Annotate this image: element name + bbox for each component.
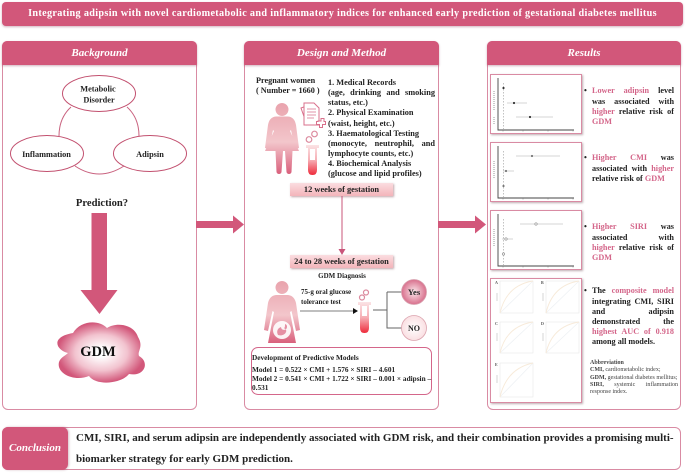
outcome: yes [401,279,427,305]
text: composite model finding: among all models. [592,337,655,346]
text: abbreviations: CMI, cardiometabolic index; [590,367,660,373]
text: study measurements: 2. Physical Examination [328,108,414,117]
text: composite model finding: highest AUC of 0.918 [592,327,674,336]
arrow: 12 weeks to 24-28 weeks [338,196,346,255]
panel: results [487,41,681,410]
text: SIRI finding: GDM [592,253,612,262]
text: pregnant women [256,76,320,95]
text: composite model finding [584,286,674,346]
text: study measurements [328,78,435,178]
icon: blood tube diagnostic [358,289,371,333]
arrow: test to tube [300,308,358,314]
chart: ROC curves [490,278,582,403]
text: adipsin finding: was associated with [592,96,674,106]
text: conclusion statement: CMI, SIRI, and serum adipsin are independently associated with GDM risk, and their combination provides a promising multi- [76,432,674,444]
text: study measurements: (waist, height, etc.) [328,118,395,128]
text: SIRI finding: Higher SIRI was [592,222,674,231]
text: adipsin finding: higher relative risk of [592,106,674,116]
chart: ROC curves: B [541,280,544,285]
diagram: metabolic disorder, inflammation, adipsin: Inflammation [22,150,71,159]
icon: pregnant woman [265,103,299,174]
label: GDM: GDM [80,344,116,360]
text: study measurements: lymphocyte counts, etc.) [328,149,413,158]
icon: GDM cloud [57,322,145,383]
chart: ROC curves: C [495,321,498,326]
text: CMI finding [584,153,674,182]
outcome: no [401,315,427,341]
heading: conclusion: Conclusion [9,442,61,454]
icon: pregnant woman with fetus [264,281,300,343]
text: composite model finding: demonstrated the [592,316,674,326]
bullet: • [584,153,587,162]
bullet: • [584,222,587,231]
heading: background: Background [71,47,128,59]
box: 24 to 28 weeks of gestation [290,255,393,268]
text: CMI finding: relative risk of GDM [592,174,665,182]
outcome: yes: Yes [408,287,421,297]
heading: results [487,41,681,65]
panel: design and method [244,41,439,410]
text: study measurements: (glucose and lipid profiles) [328,169,422,178]
text: CMI finding: Higher CMI was [592,153,674,162]
text: study measurements: 3. Haematological Testing [328,128,419,138]
chart: adipsin forest plot [490,74,582,134]
panel: conclusion [2,427,681,470]
text: abbreviations: Abbreviation [590,360,624,366]
text: abbreviations: SIRI, systemic inflammation [590,382,678,388]
model equations [252,364,432,392]
panel: background [2,41,197,410]
text: SIRI finding: higher relative risk of [592,242,674,252]
icon: blood tube [306,130,319,175]
text: composite model finding: The composite model [592,286,674,295]
text: SIRI finding [584,222,674,262]
text: abbreviations: GDM, gestational diabetes mellitus; [590,375,677,381]
text: pregnant women: Pregnant women [256,76,315,85]
text: SIRI finding: associated with [592,232,674,242]
diagram: metabolic disorder, inflammation, adipsin: Adipsin [136,150,164,159]
text: abbreviations: response index. [590,389,627,395]
branching connector: yes or no [373,292,402,328]
title [2,2,683,26]
model equations: Model 1 = 0.522 × CMI + 1.576 × SIRI – 4.601 [252,364,395,374]
text: adipsin finding: Lower adipsin level [592,86,674,95]
text: abbreviations [590,360,678,395]
box: 12 weeks of gestation: 12 weeks of gestation [304,185,379,194]
title: Integrating adipsin with novel cardiometabolic and inflammatory indices for enhanced early prediction of gestational diabetes mellitus [28,8,657,19]
heading: background [2,41,197,65]
text: adipsin finding [584,86,674,126]
text: study measurements: (monocyte, neutrophil, and [328,139,435,148]
text: CMI finding: associated with higher [592,164,674,172]
model heading: Development of Predictive Models [252,353,359,362]
text: oral glucose tolerance test: tolerance test [301,298,341,306]
text: composite model finding: and adipsin [592,306,674,316]
box: 12 weeks of gestation [290,183,393,196]
diagram: metabolic disorder, inflammation, adipsin: Disorder [83,96,115,104]
heading: results: Results [567,47,600,59]
model equations: 0.531 [252,383,268,392]
text: pregnant women: ( Number = 1660 ) [256,86,320,95]
heading: design and method [244,41,439,65]
bullet: • [584,286,587,295]
text: oral glucose tolerance test [301,288,351,306]
chart: ROC curves: E [495,362,498,367]
chart: ROC curves: A [495,280,498,285]
text: oral glucose tolerance test: 75-g oral glucose [301,288,351,296]
arrow: background to design [196,216,244,234]
arrow: design to results [438,216,486,234]
diagram: metabolic disorder, inflammation, adipsin [10,75,187,174]
text: adipsin finding: GDM [592,117,612,126]
heading: design and method: Design and Method [297,47,386,59]
diagram: metabolic disorder, inflammation, adipsin: Metabolic [80,84,116,94]
text: study measurements: status, etc.) [328,98,368,107]
chart: SIRI forest plot [490,210,582,270]
text: GDM diagnosis: GDM Diagnosis [318,272,366,280]
text: study measurements: (age, drinking and smoking [328,88,435,97]
heading: conclusion [2,427,68,470]
arrow: down to GDM [80,213,118,314]
panel: predictive models [251,347,432,395]
text: conclusion statement: biomarker strategy for early GDM prediction. [76,453,293,465]
chart: CMI forest plot [490,142,582,202]
model equations: Model 2 = 0.541 × CMI + 1.722 × SIRI – 0.001 × adipsin – [252,374,431,383]
text: study measurements: 1. Medical Records [328,78,396,87]
label: prediction: Prediction? [76,198,128,209]
text: composite model finding: integrating CMI, SIRI [592,296,674,306]
box: 24 to 28 weeks of gestation: 24 to 28 weeks of gestation [294,257,389,266]
icon: medical records [300,102,326,128]
text: study measurements: 4. Biochemical Analysis [328,159,411,168]
bullet: • [584,86,587,95]
outcome: no: NO [408,324,420,333]
text: conclusion statement [76,432,674,465]
chart: ROC curves: D [541,321,544,326]
